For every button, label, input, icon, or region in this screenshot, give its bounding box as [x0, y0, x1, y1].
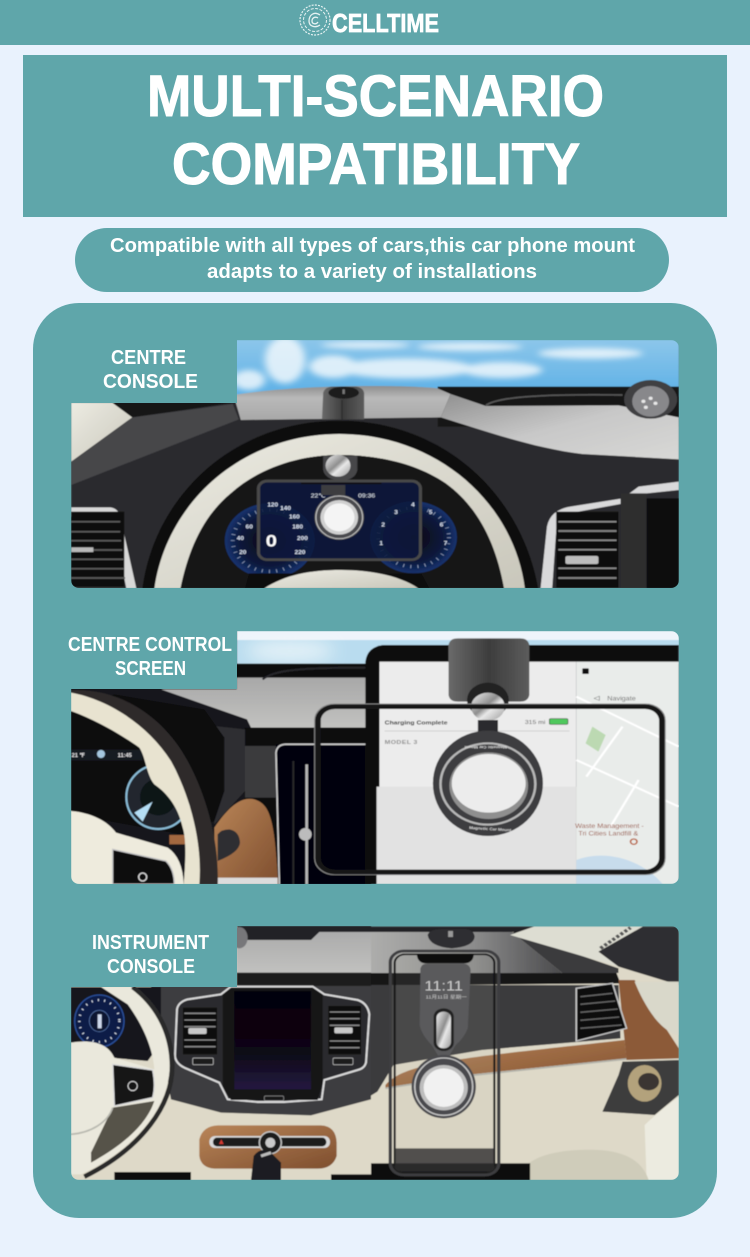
photo: centre console mount [71, 337, 679, 588]
wheel hub and spoke [71, 811, 184, 884]
label: instrument console [71, 926, 237, 987]
phone in portrait [390, 951, 499, 1175]
wood trim strip [385, 1040, 627, 1088]
phone in landscape [237, 481, 448, 560]
phone in landscape: 5 [429, 510, 433, 516]
screen bezel [223, 988, 323, 1100]
mount arm with lock screen [420, 964, 471, 1058]
tablet app text: MODEL 3 [385, 739, 418, 746]
title line 1: MULTI-SCENARIO [147, 64, 604, 129]
wood console with controls [199, 1125, 337, 1180]
steering wheel [142, 421, 538, 588]
dash left [71, 404, 239, 485]
photo: instrument console mount [71, 926, 679, 1180]
steering wheel rim [71, 690, 218, 884]
gauge cluster [225, 501, 457, 588]
subtitle line 2: adapts to a variety of installations [207, 261, 537, 283]
brand name: CELLTIME [332, 8, 439, 38]
air vent [276, 744, 371, 884]
centre stack chrome surround [175, 987, 369, 1102]
right vent [576, 983, 627, 1041]
side pillar [510, 927, 643, 967]
phone in landscape: 40 [237, 536, 245, 542]
mount arm with lock screen: 11:11 [424, 979, 463, 994]
mount stem and knob [323, 455, 357, 481]
wheel shadow recess [91, 1101, 154, 1163]
phone in landscape: 220 [295, 550, 306, 556]
mount clip and knob [449, 638, 529, 721]
sky [237, 340, 679, 397]
magnetic ring: Magnetic Car Mount [464, 745, 507, 750]
phone in landscape: 160 [289, 515, 301, 520]
ceiling mount base [428, 929, 475, 948]
magnetic ring [412, 1055, 476, 1118]
label: instrument console: CONSOLE [107, 955, 195, 978]
steering wheel ring and hub [71, 987, 170, 1174]
phone in landscape: 180 [292, 525, 304, 530]
phone in landscape: 20 [239, 550, 247, 556]
magnetic ring [433, 731, 543, 836]
dark mid dash [151, 986, 371, 1115]
icon: brand spiral [300, 5, 330, 35]
dash right [441, 394, 679, 459]
speaker [624, 380, 677, 419]
label: centre control screen [68, 631, 237, 689]
phone in landscape: 2 [381, 523, 386, 528]
steering wheel controls [113, 849, 174, 884]
upper dash [237, 926, 371, 974]
cluster hood [214, 726, 245, 824]
phone in landscape: 3 [394, 510, 399, 516]
right side of cabin [370, 926, 679, 1180]
hub of wheel [264, 570, 418, 588]
header band with brand logo [0, 0, 750, 45]
phone in landscape: 7 [444, 541, 448, 547]
gear stalk [218, 829, 240, 861]
photo: centre control screen mount [71, 631, 679, 884]
tablet screen: Navigate [607, 696, 636, 702]
steering wheel controls [113, 1064, 154, 1106]
dash top [234, 386, 451, 420]
phone frame [315, 704, 665, 874]
vents [71, 482, 679, 588]
tablet screen: ◁ [594, 694, 600, 702]
magnetic ring: Magnetic Car Mount [469, 825, 512, 832]
phone in landscape: 0 [266, 531, 277, 550]
label: centre console [71, 340, 237, 403]
label: centre control screen: SCREEN [115, 657, 186, 680]
left side: centre stack, console and wheel [71, 926, 371, 1180]
phone in landscape: 120 [267, 503, 279, 508]
label: instrument console: INSTRUMENT [92, 931, 209, 954]
tablet screen [365, 645, 679, 884]
tablet screen: Tri Cities Landfill & [578, 831, 639, 837]
centre touchscreen [234, 991, 311, 1089]
subtitle pill [75, 228, 669, 292]
phone in landscape: 200 [297, 536, 309, 542]
tablet app text: Charging Complete [385, 720, 448, 726]
mount arm with lock screen: 11月11日 星期一 [426, 994, 467, 1000]
tablet app text: 315 mi [525, 719, 545, 726]
title line 2: COMPATIBILITY [172, 132, 580, 197]
label: centre console: CENTRE [111, 346, 186, 369]
right vent [328, 1006, 361, 1065]
seat edge [71, 403, 132, 462]
cluster and gauge [71, 987, 161, 1061]
instrument cluster: 11:45 [118, 753, 132, 759]
sky strip [237, 631, 679, 664]
phone in landscape: 6 [440, 523, 444, 528]
label: centre console: CONSOLE [103, 370, 198, 393]
label: centre control screen: CENTRE CONTROL [68, 633, 232, 656]
dashboard, cluster and steering wheel [71, 664, 371, 884]
left vent [183, 1008, 217, 1065]
instrument cluster [71, 694, 224, 834]
grey dash top [161, 678, 371, 728]
phone in landscape: 09:36 [358, 493, 376, 499]
phone in landscape: 1 [379, 541, 384, 547]
phone in landscape: 22℃ [311, 493, 326, 499]
subtitle line 1: Compatible with all types of cars,this car phone mount [110, 235, 635, 257]
wood trim [214, 799, 278, 884]
instrument cluster: 21 ℉ [72, 752, 86, 759]
title banner [23, 55, 727, 217]
phone in landscape: 4 [411, 503, 416, 508]
steering wheel cream band [71, 693, 200, 884]
phone in landscape: 140 [280, 506, 292, 512]
tablet app text [385, 719, 569, 746]
roof clip [322, 387, 364, 419]
panel: installation scenarios [33, 303, 717, 1218]
phone in landscape: 60 [246, 525, 254, 530]
mid dash [370, 984, 621, 1096]
tablet screen: Waste Management - [575, 823, 644, 830]
